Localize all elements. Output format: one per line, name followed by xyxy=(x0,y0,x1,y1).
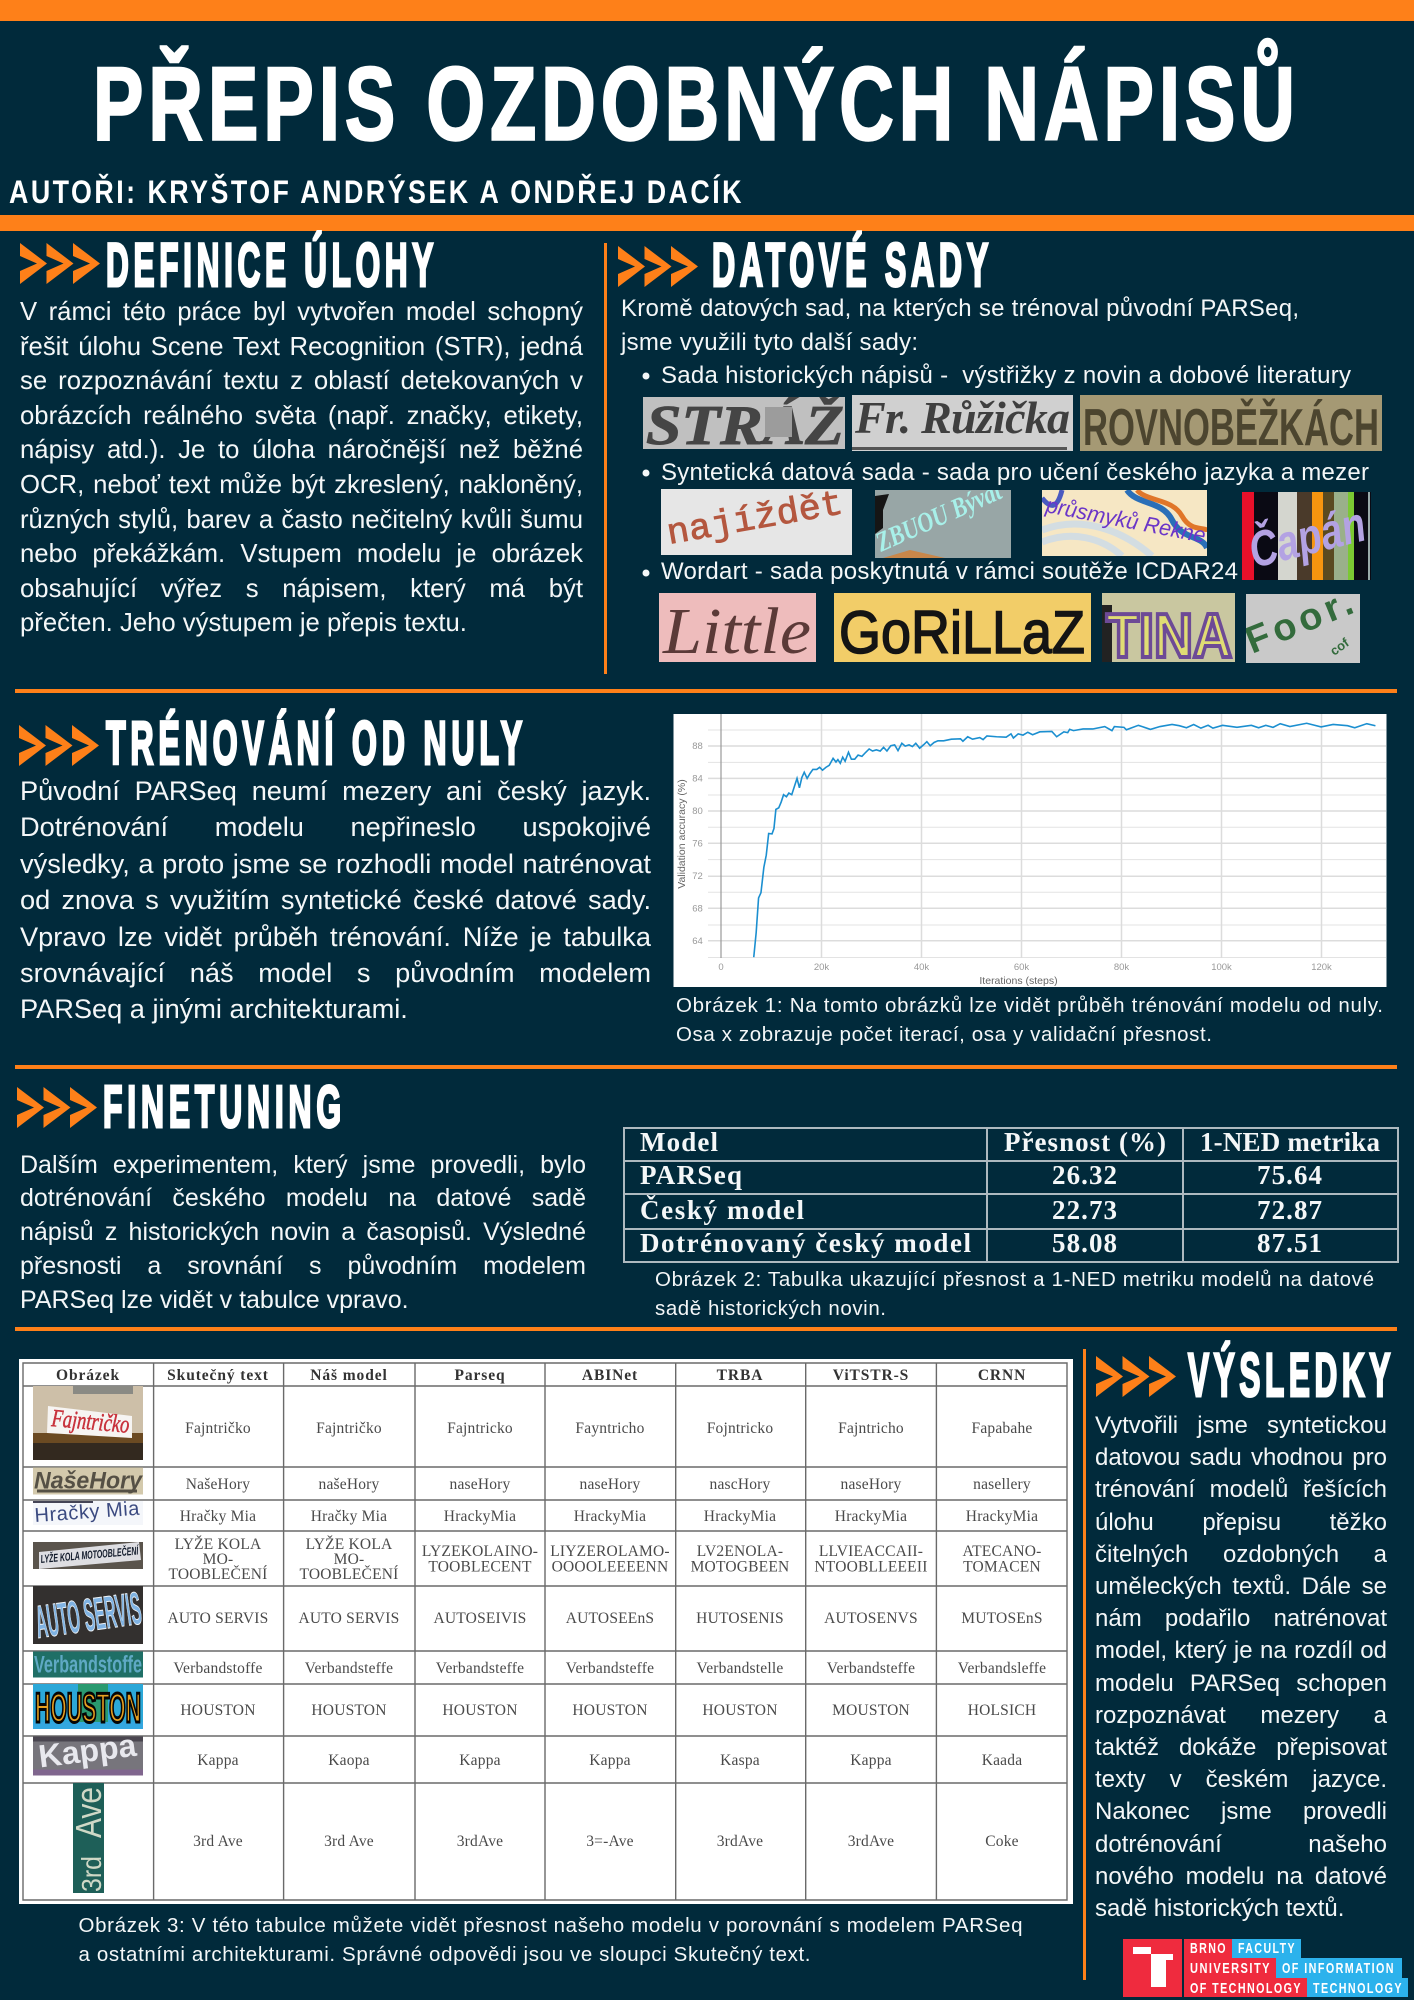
table body text: MO- xyxy=(334,1551,364,1568)
table body text: Kappa xyxy=(589,1752,631,1769)
text: finetuning: přesnosti a srovnání s původním modelem xyxy=(20,1252,586,1280)
table body text: ATECANO- xyxy=(962,1543,1042,1560)
text: výsledky: datovou sadu vhodnou pro xyxy=(1095,1444,1387,1471)
text: výsledky: čitelných ozdobných a xyxy=(1095,1541,1387,1568)
text: výsledky: trénování modelů řešících xyxy=(1095,1476,1387,1503)
table: model accuracy: 26.32 xyxy=(1052,1160,1117,1190)
table body text: 3=-Ave xyxy=(586,1833,634,1850)
table body text: Verbandstoffe xyxy=(173,1660,263,1677)
table body text: našeHory xyxy=(318,1476,380,1493)
chart: validation accuracy xyxy=(674,714,1386,987)
text: výsledky xyxy=(1095,1412,1387,1922)
text: trénování od nuly: Původní PARSeq neumí mezery ani český jazyk. xyxy=(20,775,651,806)
table body text: Fajntricko xyxy=(447,1420,513,1437)
table body text: AUTOSENVS xyxy=(824,1610,918,1627)
caption 1 xyxy=(676,994,1383,1046)
text: trénování od nuly: Dotrénování modelu nepřineslo uspokojivé xyxy=(20,811,651,842)
table body text: LV2ENOLA- xyxy=(697,1543,783,1560)
heading: datové sady xyxy=(618,231,993,299)
table body text: Fayntricho xyxy=(575,1420,645,1437)
caption 3: a ostatními architekturami. Správné odpovědi jsou ve sloupci Skutečný text. xyxy=(78,1943,810,1966)
table body text: nascHory xyxy=(710,1476,771,1493)
heading: definice úlohy: DEFINICE ÚLOHY xyxy=(106,231,438,299)
text: výsledky: uměleckých textů. Dále se xyxy=(1095,1573,1387,1600)
table body text: HOUSTON xyxy=(442,1702,518,1719)
table body text: Kappa xyxy=(850,1752,892,1769)
text: výsledky: taktéž dokáže přepisovat xyxy=(1095,1734,1387,1761)
heading: výsledky xyxy=(1096,1341,1395,1409)
text: finetuning: PARSeq lze vidět v tabulce vpravo. xyxy=(20,1286,409,1314)
table body text: Verbandsteffe xyxy=(827,1660,915,1677)
table header row: ABINet xyxy=(582,1367,638,1384)
chart: validation accuracy: 84 xyxy=(692,774,703,784)
text: definice úlohy: nápisy atd.). Je to úloha náročnější než běžné xyxy=(20,436,583,464)
table body text: MOTOGBEEN xyxy=(691,1558,789,1576)
table body text: Hračky Mia xyxy=(311,1508,387,1525)
logo: BUT FIT: UNIVERSITY xyxy=(1190,1960,1271,1977)
table body text: Kaada xyxy=(982,1752,1022,1769)
table body text: Fojntricko xyxy=(707,1420,773,1437)
table header row: Parseq xyxy=(454,1367,506,1384)
table body text: Kaopa xyxy=(328,1752,370,1769)
table body text: TOMACEN xyxy=(963,1558,1041,1576)
text: trénování od nuly: výsledky, a proto jsme se rozhodli model natrénovat xyxy=(20,848,651,879)
table body text: MO- xyxy=(203,1551,233,1568)
chart: validation accuracy: 60k xyxy=(1014,962,1029,973)
chart: validation accuracy: 40k xyxy=(914,962,929,973)
caption 3 xyxy=(78,1914,1022,1966)
chart: validation accuracy: 76 xyxy=(692,838,703,850)
table body text: Kaspa xyxy=(720,1752,760,1769)
text: výsledky: rozpoznávat mezery a xyxy=(1095,1702,1387,1729)
chart: validation accuracy: 100k xyxy=(1211,962,1232,973)
text: finetuning: Dalším experimentem, který jsme provedli, bylo xyxy=(20,1150,586,1178)
text: výsledky: sadě historických textů. xyxy=(1095,1895,1344,1922)
text: definice úlohy: V rámci této práce byl vytvořen model schopný xyxy=(20,298,583,326)
text: definice úlohy: nebo překážkám. Vstupem modelu je obrázek xyxy=(20,540,583,568)
text: výsledky: model, který je na rozdíl od xyxy=(1095,1637,1387,1664)
table body text: TOOBLEČENÍ xyxy=(299,1566,399,1583)
table body text: HrackyMia xyxy=(574,1508,646,1525)
table body text: MOUSTON xyxy=(832,1702,910,1719)
table body text: naseHory xyxy=(450,1476,511,1493)
text: výsledky: Vytvořili jsme syntetickou xyxy=(1095,1412,1387,1439)
text: výsledky: Nakonec jsme provedli xyxy=(1095,1798,1387,1825)
table body text: Verbandsteffe xyxy=(305,1660,393,1677)
table body text: Kappa xyxy=(197,1752,239,1769)
heading: trénování od nuly: TRÉNOVÁNÍ OD NULY xyxy=(106,709,527,777)
table body text: HOUSTON xyxy=(572,1702,648,1719)
table: model accuracy: 75.64 xyxy=(1257,1160,1322,1190)
table header row: Obrázek xyxy=(56,1367,120,1384)
text: definice úlohy: přečten. Jeho výstupem je přepis textu. xyxy=(20,609,467,637)
table body text: HOLSICH xyxy=(968,1702,1036,1719)
table body text: NTOOBLLEEEII xyxy=(814,1558,928,1576)
text: výsledky: dotrénování našeho xyxy=(1095,1831,1387,1858)
table body text: Kappa xyxy=(459,1752,501,1769)
text: finetuning: dotrénování českého modelu na datové sadě xyxy=(20,1184,586,1212)
text: trénování od nuly xyxy=(20,775,651,1024)
thumb: 3rd Ave xyxy=(68,1783,109,1893)
text: výsledky: nového modelu na datové xyxy=(1095,1863,1387,1890)
text: definice úlohy: OCR, neboť text může být zkreslený, nakloněný, xyxy=(20,471,583,499)
datasets intro text xyxy=(620,295,1299,356)
thumb: Kappa: Kappa xyxy=(36,1727,138,1774)
datasets intro text: jsme využili tyto další sady: xyxy=(620,329,918,356)
datasets intro text: Kromě datových sad, na kterých se trénoval původní PARSeq, xyxy=(621,295,1299,322)
chart: validation accuracy: 0 xyxy=(718,962,724,973)
divider 3 xyxy=(15,1327,1397,1331)
table body text: Verbandsteffe xyxy=(566,1660,654,1677)
table body text: 3rd Ave xyxy=(324,1833,374,1850)
table body text: Fajntričko xyxy=(185,1420,251,1437)
heading: datové sady: DATOVÉ SADY xyxy=(712,231,993,299)
chart: validation accuracy: 68 xyxy=(692,904,703,914)
table: model accuracy: Český model xyxy=(640,1195,804,1225)
table header row: ViTSTR-S xyxy=(833,1367,909,1384)
table body text: HOUSTON xyxy=(180,1702,256,1719)
image: STRÁŽ: STRÁŽ xyxy=(646,394,844,457)
table header row: Náš model xyxy=(310,1367,388,1384)
top orange bar xyxy=(0,0,1414,21)
logo: BUT FIT: BRNO xyxy=(1190,1940,1227,1957)
image: Foor: cof xyxy=(1327,635,1352,658)
text: definice úlohy: různých stylů, barev a často nečitelný kvůli šumu xyxy=(20,506,583,534)
table: model accuracy: Přesnost (%) xyxy=(1004,1127,1166,1157)
chart: validation accuracy: Validation accuracy (%) xyxy=(676,779,688,889)
text: trénování od nuly: srovnávající náš model s původním modelem xyxy=(20,957,651,988)
thumb: 3rd Ave: 3rd xyxy=(76,1856,107,1892)
table body text: NašeHory xyxy=(186,1476,250,1493)
table: model accuracy: 87.51 xyxy=(1257,1228,1322,1258)
table body text: TOOBLECENT xyxy=(428,1558,532,1576)
thumb: Hračky Mia: Hračky Mia xyxy=(34,1498,141,1527)
image: Little: Little xyxy=(662,595,811,668)
text: výsledky: nám podařilo natrénovat xyxy=(1095,1605,1387,1632)
table body text: HOUSTON xyxy=(702,1702,778,1719)
table: model accuracy: 22.73 xyxy=(1052,1195,1117,1225)
table body text: HrackyMia xyxy=(966,1508,1038,1525)
table body text: nasellery xyxy=(973,1476,1031,1493)
table header row: Skutečný text xyxy=(167,1367,269,1384)
caption 3: Obrázek 3: V této tabulce můžete vidět přesnost našeho modelu v porovnání s modelem PARSeq xyxy=(78,1914,1022,1937)
table body text: LYŽE KOLA xyxy=(306,1536,393,1553)
bullet: historical: Sada historických nápisů - výstřižky z novin a dobové literatury xyxy=(661,362,1351,389)
image: Foor: Foor. xyxy=(1240,581,1359,662)
table body text: 3rdAve xyxy=(457,1833,503,1850)
table header row: CRNN xyxy=(978,1367,1026,1384)
divider 1 xyxy=(15,689,1397,693)
table body text: Hračky Mia xyxy=(180,1508,256,1525)
table: model accuracy: 58.08 xyxy=(1052,1228,1117,1258)
text: definice úlohy xyxy=(20,298,584,637)
thumb: NašeHory: NašeHory xyxy=(34,1468,144,1494)
text: trénování od nuly: od znova s využitím syntetické české datové sady. xyxy=(20,884,651,915)
bullet: wordart: Wordart - sada poskytnutá v rámci soutěže ICDAR24 xyxy=(661,558,1238,585)
table header row xyxy=(56,1367,1026,1384)
text: výsledky: texty v českém jazyce. xyxy=(1095,1766,1387,1793)
chart: validation accuracy: 64 xyxy=(692,936,703,947)
table body text: Verbandsteffe xyxy=(436,1660,524,1677)
caption 2: sadě historických novin. xyxy=(655,1297,886,1320)
table body text: OOOOLEEEENN xyxy=(552,1558,668,1576)
table body text: Fajntricho xyxy=(838,1420,904,1437)
table body text: TOOBLEČENÍ xyxy=(168,1566,268,1583)
table body text: naseHory xyxy=(580,1476,641,1493)
image: Fr. Růžička: Fr. Růžička xyxy=(854,392,1070,443)
table body text: Coke xyxy=(985,1833,1019,1850)
table body text: LYŽE KOLA xyxy=(175,1536,262,1553)
table body text: Verbandsleffe xyxy=(958,1660,1046,1677)
text: trénování od nuly: PARSeq a jinými architekturami. xyxy=(20,993,408,1024)
text: definice úlohy: obsahující výřez s nápisem, který má být xyxy=(20,575,583,603)
image: najíždět: najíždět xyxy=(664,484,846,555)
thumb: Fajntričko xyxy=(33,1386,143,1460)
table body text: MUTOSEnS xyxy=(961,1610,1043,1627)
table body text: HrackyMia xyxy=(704,1508,776,1525)
chart: validation accuracy: 80k xyxy=(1114,962,1129,973)
caption 1: Obrázek 1: Na tomto obrázků lze vidět průběh trénování modelu od nuly. xyxy=(676,994,1383,1017)
table: model accuracy: Dotrénovaný český model xyxy=(640,1228,971,1258)
orange band under header xyxy=(0,215,1414,231)
table header row: TRBA xyxy=(717,1367,763,1384)
table body text: Verbandstelle xyxy=(697,1660,783,1677)
logo: BUT FIT xyxy=(1123,1939,1408,1997)
table: model comparison xyxy=(19,1359,1073,1904)
table body text: Fajntričko xyxy=(316,1420,382,1437)
text: definice úlohy: se rozpoznávání textu z oblastí detekovaných v xyxy=(20,367,583,395)
logo: BUT FIT: OF TECHNOLOGY xyxy=(1190,1980,1302,1997)
table body text: LYZEKOLAINO- xyxy=(422,1543,538,1560)
chart: validation accuracy: 72 xyxy=(692,871,703,882)
table body text: AUTOSEEnS xyxy=(566,1610,654,1627)
heading: trénování od nuly xyxy=(19,709,527,777)
text: definice úlohy: obrázcích reálného světa (např. značky, etikety, xyxy=(20,402,583,430)
table: model accuracy: 1-NED metrika xyxy=(1200,1127,1380,1157)
table: model accuracy: PARSeq xyxy=(640,1160,742,1190)
chart: validation accuracy: Iterations (steps) xyxy=(979,975,1058,987)
bullet: synthetic: Syntetická datová sada - sada pro učení českého jazyka a mezer xyxy=(661,459,1369,486)
heading: finetuning xyxy=(17,1074,346,1140)
text: výsledky: úlohu přepisu těžko xyxy=(1095,1509,1387,1536)
table body text: LLVIEACCAII- xyxy=(819,1543,923,1560)
table body text: AUTO SERVIS xyxy=(298,1610,400,1627)
text: finetuning xyxy=(20,1150,586,1314)
chart: validation accuracy: 88 xyxy=(692,741,703,752)
table body text: HOUSTON xyxy=(311,1702,387,1719)
table body text: 3rdAve xyxy=(717,1833,763,1850)
text: definice úlohy: řešit úlohu Scene Text Recognition (STR), jedná xyxy=(20,333,583,361)
table body text xyxy=(167,1420,1046,1850)
heading: definice úlohy xyxy=(20,231,438,299)
text: trénování od nuly: Vpravo lze vidět průběh trénování. Níže je tabulka xyxy=(20,921,651,952)
text: finetuning: nápisů z historických novin a časopisů. Výsledné xyxy=(20,1218,586,1246)
table body text: HrackyMia xyxy=(835,1508,907,1525)
chart: validation accuracy: 20k xyxy=(814,962,829,973)
table body text: HUTOSENIS xyxy=(696,1610,784,1627)
table body text: AUTOSEIVIS xyxy=(434,1610,526,1627)
chart: validation accuracy: 120k xyxy=(1311,962,1332,973)
vertical divider between definition and datasets xyxy=(604,243,607,674)
vertical divider before results xyxy=(1083,1349,1086,1980)
table: model accuracy: Model xyxy=(640,1127,718,1157)
table body text: AUTO SERVIS xyxy=(167,1610,269,1627)
text: výsledky: modelu PARSeq schopen xyxy=(1095,1670,1387,1697)
table body text: Fapabahe xyxy=(972,1420,1032,1437)
logo: BUT FIT: FACULTY xyxy=(1238,1940,1296,1957)
image: průsmyků Rekne: průsmyků Rekne xyxy=(1043,492,1208,548)
table body text: 3rd Ave xyxy=(193,1833,243,1850)
table body text: naseHory xyxy=(840,1476,902,1493)
heading: finetuning: FINETUNING xyxy=(103,1074,346,1140)
table: model accuracy xyxy=(624,1127,1398,1262)
caption 2: Obrázek 2: Tabulka ukazující přesnost a 1-NED metriku modelů na datové xyxy=(655,1268,1374,1291)
chart: validation accuracy: 80 xyxy=(692,806,703,817)
authors: AUTOŘI: KRYŠTOF ANDRÝSEK A ONDŘEJ DACÍK xyxy=(9,172,744,210)
table body text: 3rdAve xyxy=(848,1833,894,1850)
table body text: LIYZEROLAMO- xyxy=(550,1543,670,1560)
table: model accuracy: 72.87 xyxy=(1257,1195,1322,1225)
caption 1: Osa x zobrazuje počet iterací, osa y validační přesnost. xyxy=(676,1023,1212,1046)
table body text: HrackyMia xyxy=(444,1508,516,1525)
divider 2 xyxy=(15,1065,1397,1069)
caption 2 xyxy=(655,1268,1374,1320)
